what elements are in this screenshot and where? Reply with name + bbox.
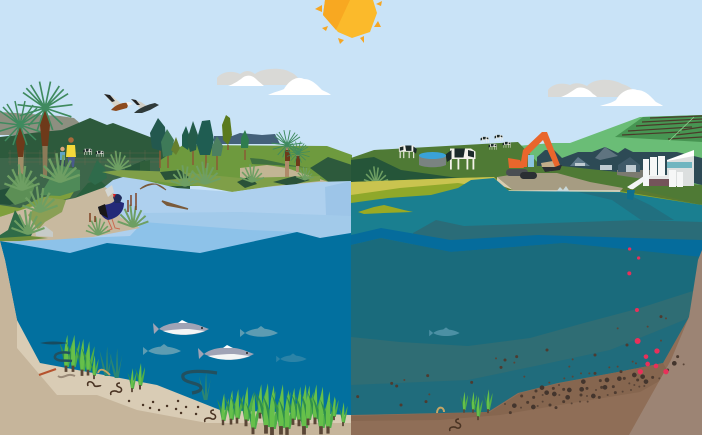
trout group [143, 320, 460, 362]
lake surface, shallow [0, 177, 351, 255]
algae bloom [358, 205, 413, 214]
fence [8, 150, 160, 165]
worms right [437, 408, 461, 431]
right deep water [351, 238, 702, 435]
icon: pukeko bird [98, 194, 124, 231]
right land: olive pasture [351, 142, 702, 205]
right sediment bed [351, 260, 702, 435]
eels [40, 342, 217, 393]
farmland rows [615, 115, 702, 142]
beach and shoreline right [351, 173, 702, 215]
sediment dots left [129, 401, 198, 414]
raupo reeds [86, 193, 148, 235]
left distant mountains [0, 112, 190, 190]
farm cows [399, 135, 511, 170]
murky lower water layers [351, 290, 696, 416]
aquatic plants right clump [217, 383, 348, 435]
left foreground bushes and olive strip [0, 160, 320, 217]
left pasture below the hills [0, 158, 160, 212]
logs [140, 184, 188, 209]
right upper water [351, 178, 702, 260]
aquatic plants left clump [59, 335, 145, 392]
right land: bright hill [351, 115, 702, 190]
water trough [419, 152, 446, 167]
left water [0, 232, 351, 435]
people [60, 137, 76, 168]
icon: paradise ducks in flight [104, 94, 159, 113]
sediment dots right [358, 317, 684, 413]
right mid water layers [351, 220, 702, 260]
sediment plume and pipe outlet [578, 190, 674, 220]
clouds: right [548, 80, 663, 106]
icon: cabbage trees right [272, 130, 310, 178]
aquatic plants, faint [100, 346, 211, 400]
toxic algae red particles [627, 247, 669, 374]
icon: sun [315, 0, 382, 44]
sky background [0, 0, 702, 200]
left rolling green field [130, 145, 352, 190]
sandy shore [0, 187, 140, 242]
cows in left distance [83, 149, 104, 157]
shore vegetation and rocks [0, 151, 314, 241]
icon: cabbage trees left [0, 82, 72, 190]
clouds: left [217, 69, 331, 95]
houses [537, 147, 702, 185]
aquatic plants right side [460, 389, 492, 420]
worms and burrowers left [39, 369, 216, 422]
right rock wall [629, 250, 702, 435]
left lake bed [0, 241, 351, 435]
icon: factory with discharge pipe [627, 150, 694, 190]
native trees [150, 115, 249, 170]
distant houses left [214, 133, 280, 144]
icon: orange excavator [506, 132, 562, 179]
